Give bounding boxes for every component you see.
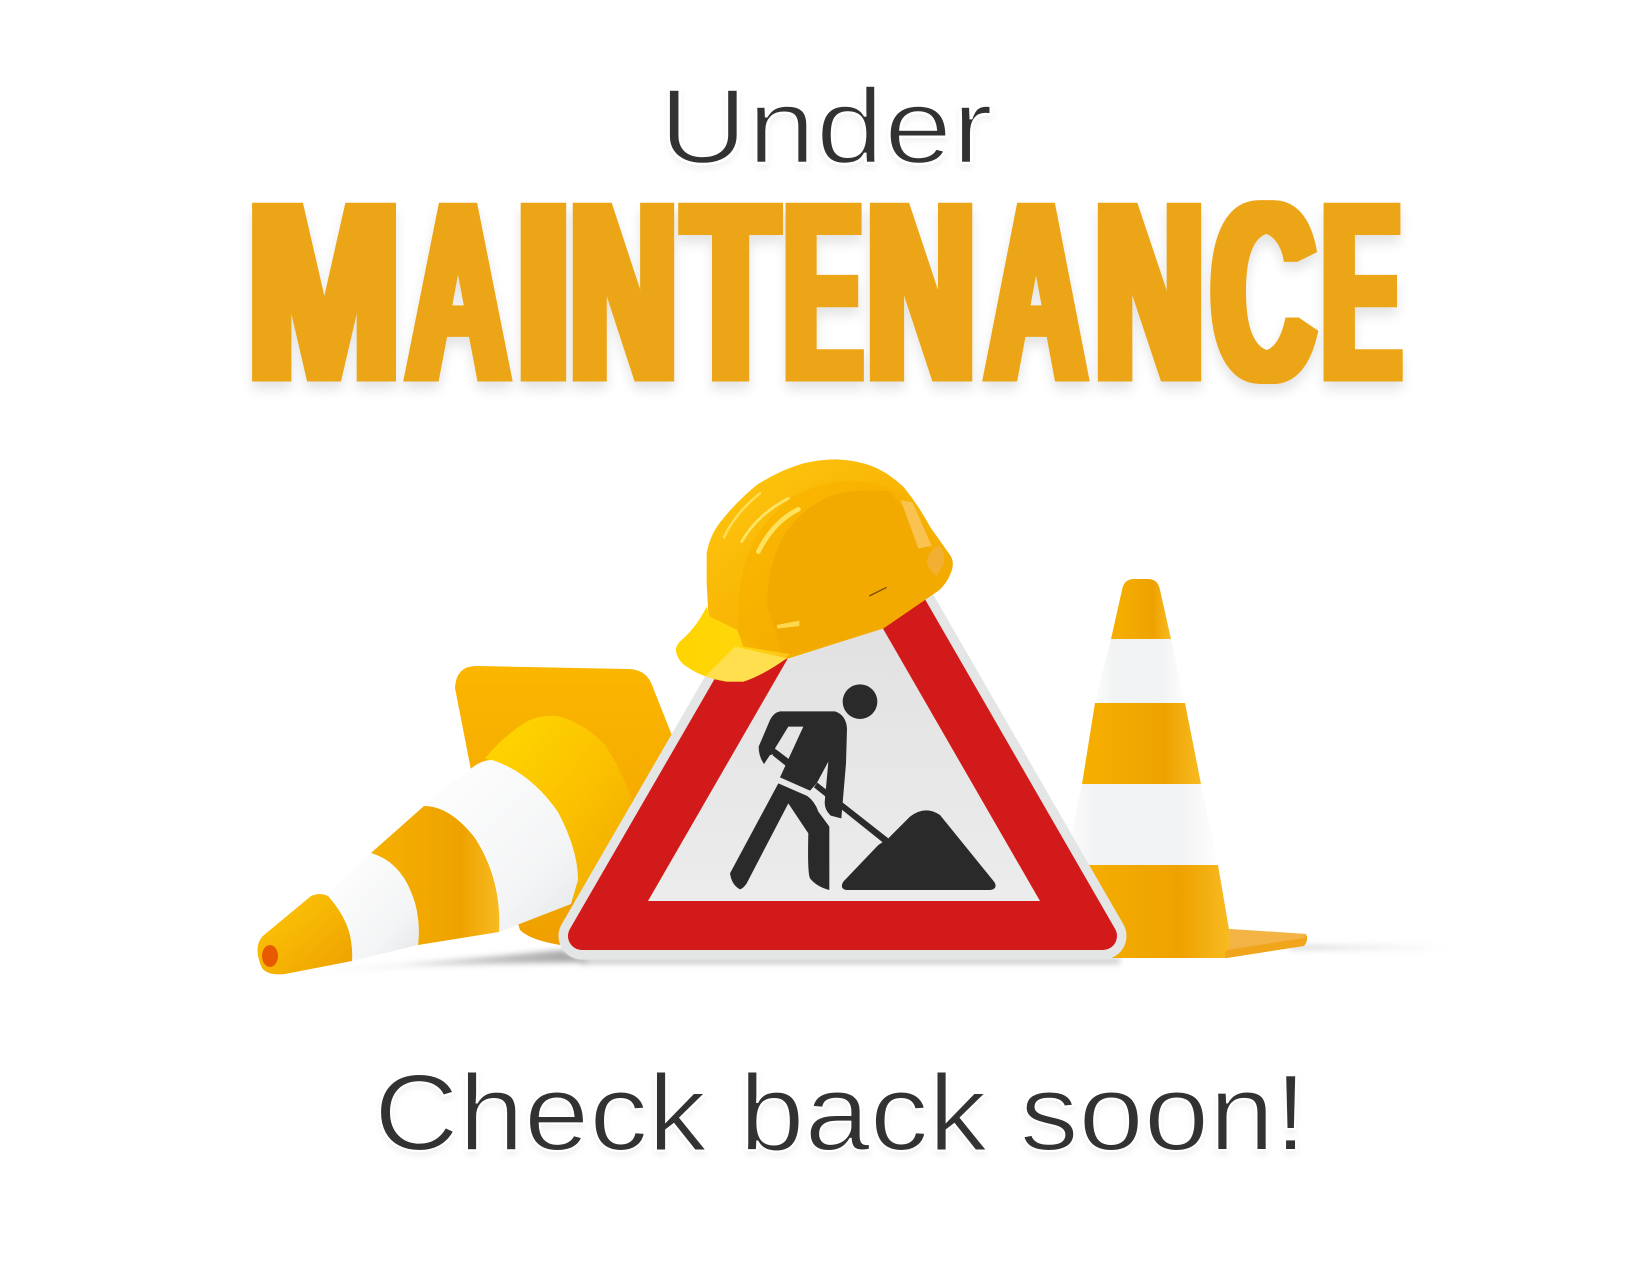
title: MAINTENANCE: I (515, 150, 572, 434)
hat crown panel (767, 491, 939, 657)
title: MAINTENANCE: A (408, 150, 508, 434)
illustration: construction scene (258, 459, 1450, 975)
hat inner panel (738, 481, 949, 660)
hat side glare (901, 500, 932, 548)
heading: Under: Under (659, 66, 993, 186)
brim highlight (705, 647, 787, 682)
title: MAINTENANCE: M (248, 150, 400, 434)
hat brim (676, 607, 790, 682)
title: MAINTENANCE: A (987, 150, 1085, 434)
white band lower (326, 853, 419, 961)
cone base (455, 666, 680, 945)
footer text: Check back soon!: Check back soon! (374, 1052, 1307, 1174)
text: E (1323, 150, 1400, 434)
hat dome (707, 459, 953, 660)
title: MAINTENANCE: C (1212, 150, 1314, 434)
title: MAINTENANCE: N (1096, 150, 1204, 434)
worker pictogram (730, 684, 996, 890)
title: MAINTENANCE: E (785, 150, 861, 434)
legs (730, 783, 829, 890)
road sign: triangle (582, 485, 1103, 936)
head (843, 684, 877, 719)
cone tip (258, 894, 352, 974)
sign border (582, 485, 1103, 936)
cone tip hole (262, 945, 278, 967)
sign red frame (582, 485, 1103, 936)
white stripe lower (1065, 784, 1218, 865)
title: MAINTENANCE: T (684, 150, 777, 434)
icon: hard hat (676, 459, 953, 682)
hat vent marks (777, 621, 799, 629)
middle orange stripe (1082, 703, 1201, 784)
white stripe upper (1095, 639, 1185, 703)
icon: fallen traffic cone (258, 666, 680, 974)
dirt pile (842, 810, 996, 890)
torso and arms (759, 711, 847, 818)
icon: standing traffic cone (1065, 579, 1307, 958)
sign inner panel (648, 561, 1040, 901)
bottom orange stripe (1065, 865, 1230, 958)
cone foot (1100, 929, 1307, 958)
hat ridge highlights (724, 493, 798, 552)
shovel shaft (814, 783, 888, 843)
shovel grip (773, 749, 790, 766)
ground shadows (285, 945, 1450, 975)
orange band (371, 806, 499, 945)
top band (485, 716, 632, 905)
white band upper (415, 760, 578, 932)
top segment (1111, 579, 1171, 639)
title: MAINTENANCE: N (571, 150, 676, 434)
title: MAINTENANCE: N (868, 150, 975, 434)
hat side clip (927, 545, 944, 576)
